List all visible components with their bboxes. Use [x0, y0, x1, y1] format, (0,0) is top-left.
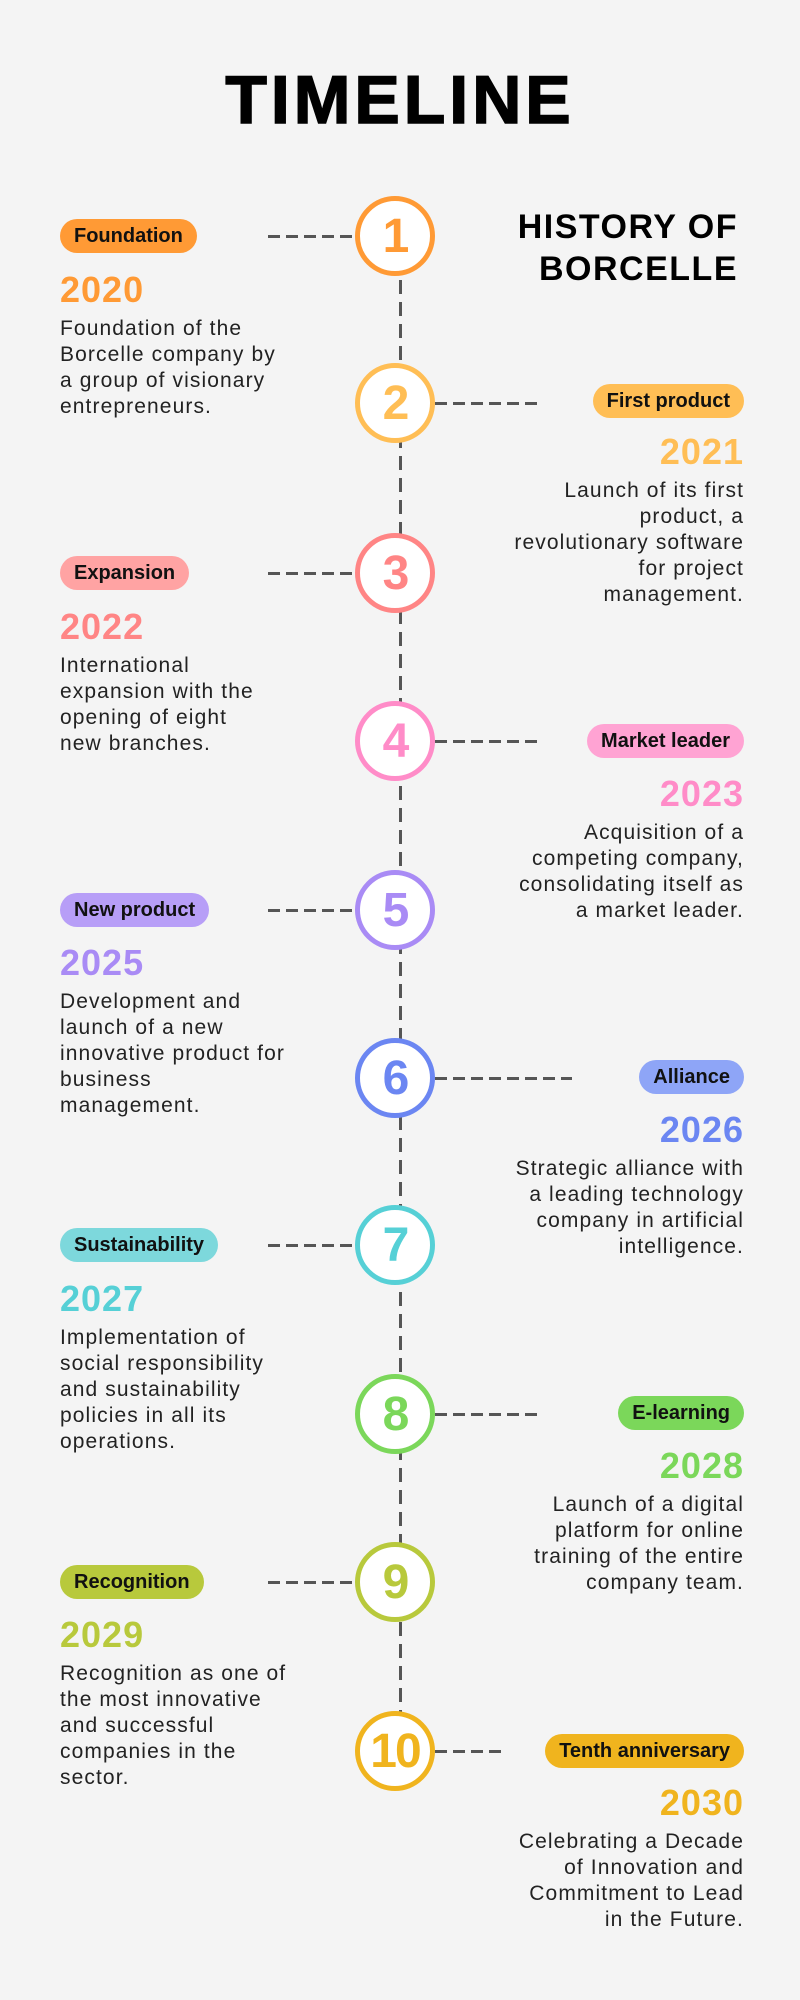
- connector 5: [268, 909, 356, 912]
- circle 2: 2: [383, 377, 407, 430]
- circle 6: 6: [383, 1052, 407, 1105]
- text 5: Development and: [60, 990, 241, 1013]
- circle 3: [355, 533, 435, 613]
- text 4: consolidating itself as: [519, 873, 744, 896]
- item 8: [355, 1374, 744, 1594]
- text 9: companies in the: [60, 1740, 236, 1763]
- circle 9: [355, 1542, 435, 1622]
- text 2: revolutionary software: [514, 531, 744, 554]
- text 6: Strategic alliance with: [516, 1157, 744, 1180]
- text 10: Celebrating a Decade: [519, 1830, 744, 1853]
- pill 5: New product: [74, 899, 195, 921]
- text 10: in the Future.: [605, 1908, 744, 1931]
- pill 1: Foundation: [74, 225, 183, 247]
- pill 7: Sustainability: [74, 1234, 204, 1256]
- subtitle: [518, 208, 738, 288]
- pill 10: [545, 1734, 744, 1768]
- circle 2: [355, 363, 435, 443]
- text 5: [60, 990, 285, 1117]
- pill 8: E-learning: [632, 1402, 730, 1424]
- pill 1: [60, 219, 197, 253]
- pill 9: Recognition: [74, 1571, 190, 1593]
- text 4: a market leader.: [576, 899, 744, 922]
- subtitle: HISTORY OF: [518, 208, 738, 246]
- text 3: International: [60, 654, 190, 677]
- circle 5: 5: [383, 884, 407, 937]
- text 5: innovative product for: [60, 1042, 285, 1065]
- text 7: social responsibility: [60, 1352, 264, 1375]
- year 2: 2021: [660, 431, 744, 472]
- title: TIMELINE: [225, 62, 575, 138]
- item 3: [60, 533, 435, 755]
- text 2: management.: [603, 583, 744, 606]
- pill 9: [60, 1565, 204, 1599]
- year 4: 2023: [660, 773, 744, 814]
- pill 2: First product: [607, 390, 730, 412]
- connector 6: [435, 1077, 572, 1080]
- connector 1: [268, 235, 356, 238]
- pill 8: [618, 1396, 744, 1430]
- text 9: Recognition as one of: [60, 1662, 286, 1685]
- pill 4: [587, 724, 744, 758]
- text 7: operations.: [60, 1430, 176, 1453]
- text 4: [519, 821, 744, 922]
- text 1: Foundation of the: [60, 317, 242, 340]
- text 10: [519, 1830, 744, 1931]
- circle 9: 9: [383, 1556, 407, 1609]
- text 9: [60, 1662, 286, 1789]
- text 10: Commitment to Lead: [529, 1882, 744, 1905]
- year 1: 2020: [60, 269, 144, 310]
- text 6: company in artificial: [536, 1209, 744, 1232]
- pill 3: Expansion: [74, 562, 175, 584]
- text 2: Launch of its first: [564, 479, 744, 502]
- text 2: product, a: [640, 505, 744, 528]
- year 3: 2022: [60, 606, 144, 647]
- text 7: [60, 1326, 264, 1453]
- item 1: [60, 196, 435, 418]
- text 4: Acquisition of a: [584, 821, 744, 844]
- pill 10: Tenth anniversary: [559, 1740, 730, 1762]
- pill 3: [60, 556, 189, 590]
- text 1: [60, 317, 276, 418]
- vertical dashed line: [399, 236, 402, 1751]
- item 6: [355, 1038, 744, 1258]
- circle 6: [355, 1038, 435, 1118]
- text 5: management.: [60, 1094, 201, 1117]
- pill 2: [593, 384, 744, 418]
- circle 4: [355, 701, 435, 781]
- text 1: entrepreneurs.: [60, 395, 212, 418]
- text 9: and successful: [60, 1714, 214, 1737]
- text 7: and sustainability: [60, 1378, 241, 1401]
- connector 4: [435, 740, 538, 743]
- circle 10: [355, 1711, 435, 1791]
- item 7: [60, 1205, 435, 1453]
- text 3: new branches.: [60, 732, 211, 755]
- text 8: training of the entire: [534, 1545, 744, 1568]
- text 3: [60, 654, 254, 755]
- text 1: Borcelle company by: [60, 343, 276, 366]
- text 4: competing company,: [532, 847, 744, 870]
- connector 3: [268, 572, 356, 575]
- circle 5: [355, 870, 435, 950]
- text 3: expansion with the: [60, 680, 254, 703]
- text 8: Launch of a digital: [553, 1493, 744, 1516]
- pill 6: Alliance: [653, 1066, 730, 1088]
- circle 1: 1: [383, 210, 407, 263]
- text 5: launch of a new: [60, 1016, 224, 1039]
- text 6: a leading technology: [529, 1183, 744, 1206]
- text 2: for project: [639, 557, 744, 580]
- pill 6: [639, 1060, 744, 1094]
- pill 4: Market leader: [601, 730, 730, 752]
- text 9: the most innovative: [60, 1688, 262, 1711]
- year 7: 2027: [60, 1278, 144, 1319]
- pill 5: [60, 893, 209, 927]
- text 2: [514, 479, 744, 606]
- year 6: 2026: [660, 1109, 744, 1150]
- connector 9: [268, 1581, 356, 1584]
- text 5: business: [60, 1068, 152, 1091]
- year 10: 2030: [660, 1782, 744, 1823]
- text 6: [516, 1157, 744, 1258]
- text 8: platform for online: [555, 1519, 744, 1542]
- text 7: policies in all its: [60, 1404, 227, 1427]
- text 8: company team.: [586, 1571, 744, 1594]
- year 8: 2028: [660, 1445, 744, 1486]
- text 7: Implementation of: [60, 1326, 246, 1349]
- year 9: 2029: [60, 1614, 144, 1655]
- circle 1: [355, 196, 435, 276]
- connector 2: [435, 402, 538, 405]
- item 10: [355, 1711, 744, 1931]
- item 5: [60, 870, 435, 1117]
- subtitle: BORCELLE: [539, 250, 738, 288]
- year 5: 2025: [60, 942, 144, 983]
- circle 10: 10: [370, 1725, 420, 1778]
- connector 10: [435, 1750, 504, 1753]
- circle 7: 7: [383, 1219, 407, 1272]
- connector 8: [435, 1413, 538, 1416]
- text 1: a group of visionary: [60, 369, 265, 392]
- pill 7: [60, 1228, 218, 1262]
- text 10: of Innovation and: [564, 1856, 744, 1879]
- text 8: [534, 1493, 744, 1594]
- item 9: [60, 1542, 435, 1789]
- circle 8: 8: [383, 1388, 407, 1441]
- circle 7: [355, 1205, 435, 1285]
- circle 3: 3: [383, 547, 407, 600]
- item 4: [355, 701, 744, 922]
- item 2: [355, 363, 744, 606]
- text 6: intelligence.: [619, 1235, 744, 1258]
- circle 4: 4: [383, 715, 407, 768]
- connector 7: [268, 1244, 356, 1247]
- text 3: opening of eight: [60, 706, 227, 729]
- text 9: sector.: [60, 1766, 130, 1789]
- circle 8: [355, 1374, 435, 1454]
